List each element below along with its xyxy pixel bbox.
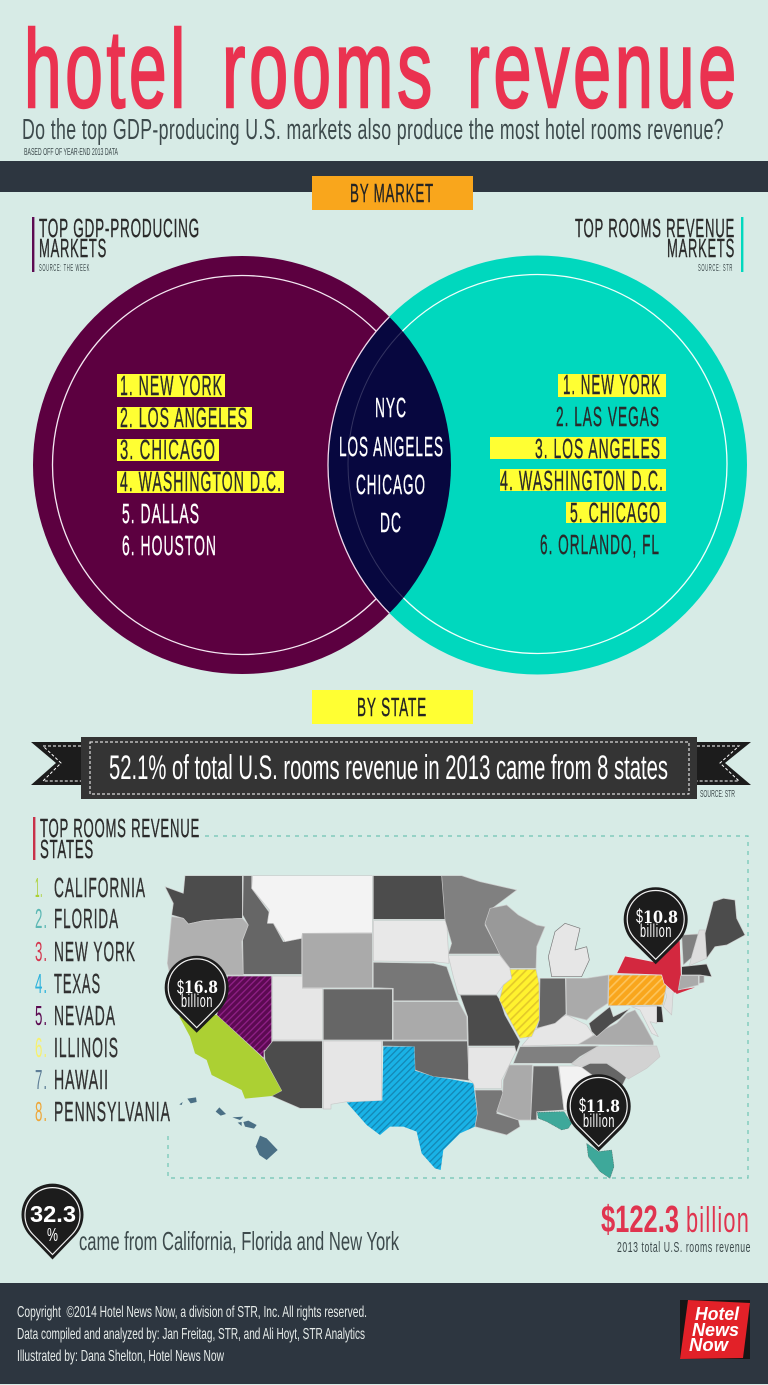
footer credits: Data compiled and analyzed by: Jan Freitag, STR, and Ali Hoyt, STR Analytics xyxy=(17,1326,365,1343)
heading: top GDP markets: SOURCE: THE WEEK xyxy=(39,263,90,274)
heading: top states: STATES xyxy=(40,834,94,864)
US map xyxy=(165,876,745,1178)
overlap list: DC xyxy=(380,507,402,538)
heading: top GDP markets: TOP GDP-PRODUCING xyxy=(39,213,200,243)
pin: Florida: billion xyxy=(583,1111,615,1131)
Hawaii xyxy=(179,1097,278,1160)
left list: 2. LOS ANGELES xyxy=(120,402,248,433)
states ranking list xyxy=(35,872,171,1127)
by market label xyxy=(312,176,473,210)
top dark band xyxy=(0,161,768,192)
title xyxy=(24,8,740,131)
right list xyxy=(490,369,666,560)
pin: California: 16.8 xyxy=(184,978,218,998)
data note: BASED OFF OF YEAR-END 2013 DATA xyxy=(24,147,118,158)
venn diagram: LOS ANGELES xyxy=(339,431,444,462)
states ranking list: 3. xyxy=(35,936,48,967)
ribbon banner xyxy=(31,737,751,799)
by state label: BY STATE xyxy=(357,692,427,722)
pin: California: $ xyxy=(177,978,184,999)
logo: Hotel News Now: News xyxy=(692,1320,739,1340)
states ranking list: CALIFORNIA xyxy=(54,872,146,903)
states ranking list: HAWAII xyxy=(54,1064,109,1095)
heading: top states xyxy=(33,813,200,864)
pin: Florida: 11.8 xyxy=(586,1097,620,1117)
text: PENNSYLVANIA xyxy=(54,1096,171,1127)
logo: Hotel News Now: Hotel xyxy=(695,1304,740,1324)
left list: 4. WASHINGTON D.C. xyxy=(120,466,282,497)
title: rooms xyxy=(222,8,436,131)
footer credits: Copyright ©2014 Hotel News Now, a division of STR, Inc. All rights reserved. xyxy=(17,1304,367,1321)
by market label: BY MARKET xyxy=(350,178,434,208)
title: hotel xyxy=(24,8,189,131)
pin: 32.3 percent: 32.3 xyxy=(30,1201,76,1227)
left list: 1. NEW YORK xyxy=(120,370,223,401)
logo: Hotel News Now xyxy=(680,1300,750,1359)
overlap lens xyxy=(328,317,451,613)
overlap list: NYC xyxy=(375,392,407,423)
pin: 32.3 percent xyxy=(22,1184,84,1260)
states ranking list: 1. xyxy=(35,872,43,903)
pin: Florida: $ xyxy=(579,1096,586,1117)
pin: New York: 10.8 xyxy=(643,908,678,928)
overlap list: CHICAGO xyxy=(356,469,426,500)
venn diagram xyxy=(33,256,747,674)
left list: 3. CHICAGO xyxy=(120,434,216,465)
pin: New York xyxy=(624,887,688,964)
heading: top states: TOP ROOMS REVENUE xyxy=(40,813,200,843)
heading: top GDP markets xyxy=(32,213,200,274)
states ranking list: ILLINOIS xyxy=(54,1032,119,1063)
states ranking list: NEVADA xyxy=(54,1000,116,1031)
heading: top rooms revenue markets xyxy=(575,213,743,274)
pin: California xyxy=(165,956,229,1033)
eastern states xyxy=(442,876,745,1178)
western states xyxy=(165,876,477,1170)
total revenue callout xyxy=(601,1199,751,1256)
by state label xyxy=(312,690,473,724)
footer credits xyxy=(17,1304,367,1365)
share statement: came from California, Florida and New York xyxy=(79,1226,400,1256)
pin: California: billion xyxy=(181,991,213,1011)
left list: 6. HOUSTON xyxy=(122,530,217,561)
footer band xyxy=(0,1283,768,1384)
pin: 32.3 percent: % xyxy=(47,1225,58,1245)
states ranking list: 5. xyxy=(35,1000,48,1031)
states ranking list: 4. xyxy=(35,968,48,999)
right list: 2. LAS VEGAS xyxy=(556,401,660,432)
right list: 5. CHICAGO xyxy=(570,497,661,528)
states ranking list: 8. xyxy=(35,1096,48,1127)
pin: New York: billion xyxy=(640,921,672,941)
heading: top GDP markets: MARKETS xyxy=(39,233,107,263)
states ranking list: 2. xyxy=(35,903,48,934)
pin: New York: $ xyxy=(636,907,643,928)
pin: Florida xyxy=(567,1074,631,1151)
overlap list xyxy=(339,392,444,538)
circle: GDP markets xyxy=(33,256,451,674)
footer credits: Illustrated by: Dana Shelton, Hotel News Now xyxy=(17,1348,224,1365)
left list: 5. DALLAS xyxy=(122,498,200,529)
states ranking list: FLORIDA xyxy=(54,903,119,934)
total revenue callout: $122.3 xyxy=(601,1199,679,1241)
right list: 1. NEW YORK xyxy=(563,369,661,400)
states ranking list: TEXAS xyxy=(54,968,101,999)
left list xyxy=(117,370,284,561)
states ranking list: NEW YORK xyxy=(54,936,136,967)
source note: SOURCE: STR xyxy=(700,789,735,800)
states ranking list: 7. xyxy=(35,1064,48,1095)
states ranking list: 6. xyxy=(35,1032,48,1063)
circle: rooms revenue markets xyxy=(328,256,747,674)
logo: Hotel News Now: Now xyxy=(689,1335,729,1355)
